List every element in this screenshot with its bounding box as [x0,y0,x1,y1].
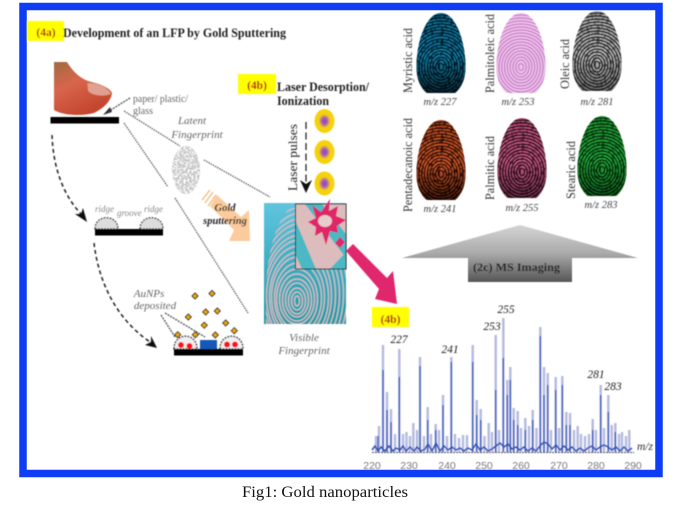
spectrum dark peaks [378,336,615,452]
fingerprint: pentadecanoic acid: Pentadecanoic acid [401,117,415,212]
fingerprint: stearic acid: m/z 283 [585,200,617,211]
cross-section: ridge and groove [95,204,163,236]
AuNPs label: AuNPs [133,288,164,300]
dashed arrow to gold-coated section [94,243,157,348]
MS imaging arrow: (2c) MS Imaging [473,262,560,274]
x axis ticks: 290 [624,460,642,472]
fingerprint: palmitoleic acid [471,11,571,122]
x axis ticks: 260 [512,460,530,472]
4b tag: (4b) [247,80,267,92]
dotted guide lines [124,111,270,313]
x axis ticks: 240 [438,460,456,472]
gold sputtering arrow: sputtering [202,216,247,227]
fingerprint: myristic acid [391,11,491,122]
x axis ticks [363,460,642,472]
x axis ticks: 220 [363,460,381,472]
4a tag [27,21,64,41]
fingerprint: oleic acid [547,9,647,120]
peak labels: 241 [441,344,459,356]
latent fingerprint label [170,115,224,141]
surface label [103,94,188,117]
spectrum baseline [372,452,634,454]
icon: finger on surface [50,62,119,124]
4a tag: (4a) [36,27,56,39]
fingerprint: palmitoleic acid: m/z 253 [502,97,534,108]
peak labels: 227 [390,334,409,346]
fingerprint: oleic acid: m/z 281 [581,97,613,108]
x axis ticks: 270 [550,460,568,472]
peak labels: 253 [483,321,501,333]
cross-section: ridge and groove: ridge [144,204,163,214]
gold sputtering arrow: Gold [214,203,236,214]
laser burst [308,199,346,245]
fingerprint: pentadecanoic acid: m/z 241 [424,204,456,215]
panel: fatty acid MS images [391,9,652,229]
visible fingerprint label: Fingerprint [277,345,331,357]
AuNPs label: deposited [134,300,177,312]
AuNP arrows [161,313,205,337]
caption: Fig1: Gold nanoparticles [242,484,408,501]
4a heading: Development of an LFP by Gold Sputtering [63,26,287,40]
fingerprint: palmitic acid [472,116,572,227]
4b heading [277,80,369,108]
latent fingerprint [172,146,200,194]
spectrum noise floor [372,442,632,451]
fingerprint: oleic acid: Oleic acid [558,38,572,89]
4b heading: Laser Desorption/ [277,80,369,94]
latent fingerprint label: Latent [177,115,207,127]
4b heading: Ionization [277,94,329,108]
4b spectrum tag [372,307,409,327]
MS imaging arrow [402,225,638,282]
spectrum light peaks [376,318,629,452]
peak labels [390,304,622,393]
4b tag [238,74,276,94]
x axis ticks: 230 [400,460,418,472]
gold nanoparticles [175,290,237,338]
fingerprint: stearic acid [552,114,652,225]
fingerprint: myristic acid: m/z 227 [424,97,457,108]
fingerprint: pentadecanoic acid [391,117,491,229]
cross-section: ridge and groove: ridge [95,204,114,214]
m/z axis label: m/z [637,441,654,453]
cross-section: ridge and groove: groove [117,208,142,218]
chart: mass spectrum [363,304,654,472]
x axis ticks: 250 [475,460,493,472]
laser pulses arrow [300,122,312,193]
gold sputtering arrow [202,190,250,241]
surface label: paper/ plastic/ [133,94,188,105]
4b spectrum tag: (4b) [381,314,401,326]
pink arrow to spectrum [335,237,397,304]
AuNPs label [133,288,177,312]
dashed arrow to cross-section [52,135,87,222]
fingerprint: palmitic acid: m/z 255 [506,203,538,214]
panel: 4a gold sputtering development [27,21,287,356]
peak labels: 281 [587,369,605,381]
cross-section: gold nanoparticles deposited [174,290,243,356]
visible fingerprint label [277,332,331,357]
surface label: glass [133,106,153,117]
latent fingerprint label: Fingerprint [170,129,224,141]
fingerprint: myristic acid: Myristic acid [401,27,415,93]
laser pulse spots [314,109,334,196]
peak labels: 255 [497,304,515,316]
inset magnified ridges [296,204,346,269]
laser pulses label: Laser pulses [286,124,300,191]
fingerprint: stearic acid: Stearic acid [564,140,578,199]
fingerprint: palmitoleic acid: Palmitoleic acid [483,13,497,93]
visible fingerprint image [263,198,348,325]
peak labels: 283 [604,381,622,393]
fingerprint: palmitic acid: Palmitic acid [483,135,497,200]
visible fingerprint label: Visible [289,332,319,344]
panel: 4b laser desorption ionization [238,74,397,381]
x axis ticks: 280 [587,460,605,472]
